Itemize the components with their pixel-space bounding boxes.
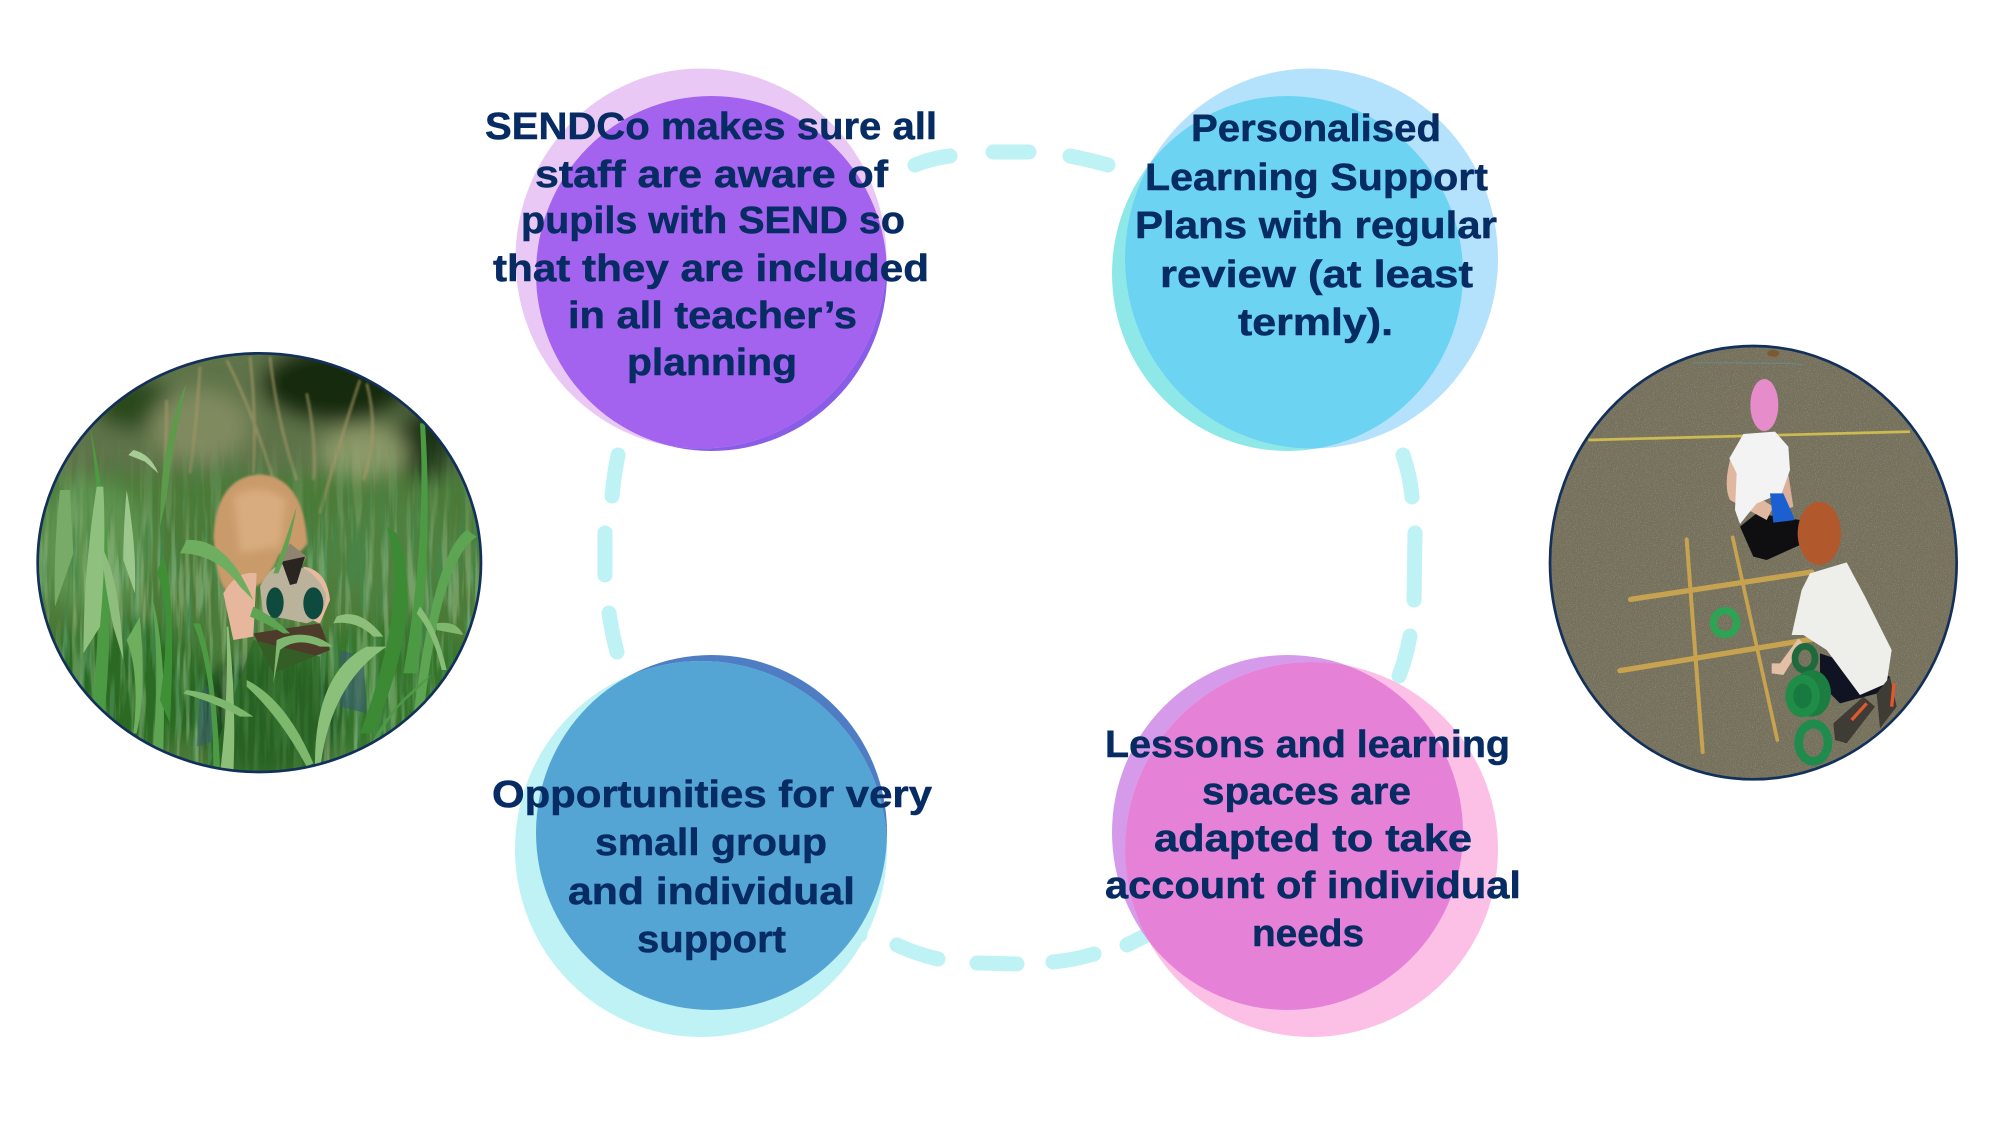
panel: Personalised Learning Support Plans circle — [1112, 68, 1498, 451]
text: small group support: support — [637, 919, 786, 961]
photo: children playing noughts and crosses on playground — [1548, 344, 1958, 781]
text: small group support: Opportunities for very — [492, 774, 932, 816]
text: adapted lessons: adapted to take — [1154, 818, 1472, 860]
text: SENDCo awareness — [485, 106, 937, 384]
text: support plans: Plans with regular — [1135, 205, 1497, 247]
text: support plans — [1135, 108, 1497, 344]
text: SENDCo awareness: SENDCo makes sure all — [485, 106, 937, 148]
text: support plans: Personalised — [1191, 108, 1441, 150]
text: small group support: and individual — [568, 871, 855, 913]
text: adapted lessons: spaces are — [1202, 771, 1411, 813]
green rings — [1713, 611, 1737, 635]
text: SENDCo awareness: planning — [627, 342, 797, 384]
girl: legs, arms, shirt, cap, cup — [1740, 513, 1800, 560]
boy: hair, shirt, arm, shoes — [1798, 502, 1841, 565]
jeans hint — [340, 650, 367, 713]
text: adapted lessons — [1105, 724, 1521, 955]
grass texture behind child — [39, 448, 480, 770]
text: SENDCo awareness: that they are included — [493, 248, 929, 290]
text: adapted lessons: needs — [1252, 913, 1364, 955]
text: SENDCo awareness: staff are aware of — [535, 154, 888, 196]
text: support plans: termly). — [1238, 302, 1393, 344]
text: adapted lessons: account of individual — [1105, 865, 1521, 907]
grass blades — [40, 383, 477, 773]
court line — [1588, 432, 1910, 440]
text: SENDCo awareness: pupils with SEND so — [521, 200, 905, 242]
dashed ring connecting the four circles — [605, 152, 1415, 964]
text: small group support: small group — [595, 822, 827, 864]
background dry stems — [163, 357, 373, 513]
panel: adapted lessons circle — [1105, 655, 1521, 1037]
sticks — [1620, 537, 1817, 752]
child hair — [213, 474, 307, 600]
text: support plans: review (at least — [1160, 254, 1473, 296]
panel: small group support circle — [492, 655, 932, 1037]
text: support plans: Learning Support — [1145, 157, 1488, 199]
text: small group support — [492, 774, 932, 961]
panel: SENDCo awareness circle — [485, 68, 937, 451]
photo: child with binoculars in tall grass — [36, 352, 482, 774]
binoculars — [260, 564, 326, 623]
text: SENDCo awareness: in all teacher’s — [568, 295, 857, 337]
text: adapted lessons: Lessons and learning — [1105, 724, 1510, 766]
